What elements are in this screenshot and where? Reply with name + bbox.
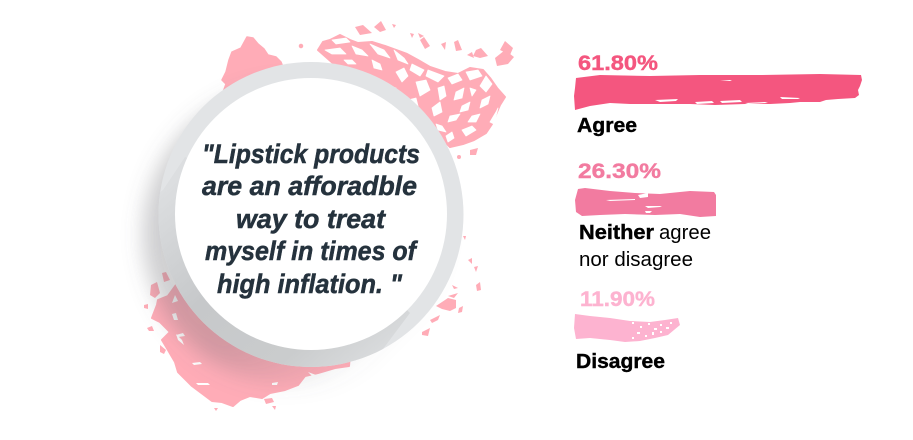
darker ring fold	[158, 193, 410, 367]
brush bar agree	[574, 74, 862, 110]
splatter: upper left blob	[222, 37, 302, 105]
outer grey ring	[158, 62, 464, 367]
quote text	[202, 139, 420, 299]
inner white disc	[175, 78, 447, 350]
label disagree: Disagree	[576, 351, 665, 373]
circle drop shadow	[143, 85, 443, 385]
label neither: agree	[659, 222, 711, 244]
value 61.80%: 61.80%	[578, 52, 658, 75]
quote text: myself in times of	[205, 236, 419, 266]
stat: neither	[575, 160, 716, 271]
brush bar disagree	[574, 314, 680, 342]
splatter: upper right textured blob	[318, 21, 514, 159]
stat: agree	[574, 52, 862, 137]
quote text: "Lipstick products	[202, 139, 420, 169]
splatter: lower blob	[144, 236, 481, 411]
value 26.30%: 26.30%	[578, 160, 661, 183]
label neither: nor disagree	[579, 249, 693, 271]
quote text: are an afforadble	[202, 171, 417, 201]
stat: disagree	[574, 288, 680, 373]
label neither	[579, 222, 711, 271]
value 11.90%: 11.90%	[580, 288, 655, 311]
quote text: way to treat	[236, 204, 386, 234]
quote text: high inflation. "	[217, 269, 403, 299]
brush bar neither	[575, 188, 716, 217]
label agree: Agree	[577, 115, 637, 137]
infographic canvas	[134, 21, 862, 411]
label neither: Neither	[579, 222, 654, 244]
quote circle	[150, 62, 464, 380]
